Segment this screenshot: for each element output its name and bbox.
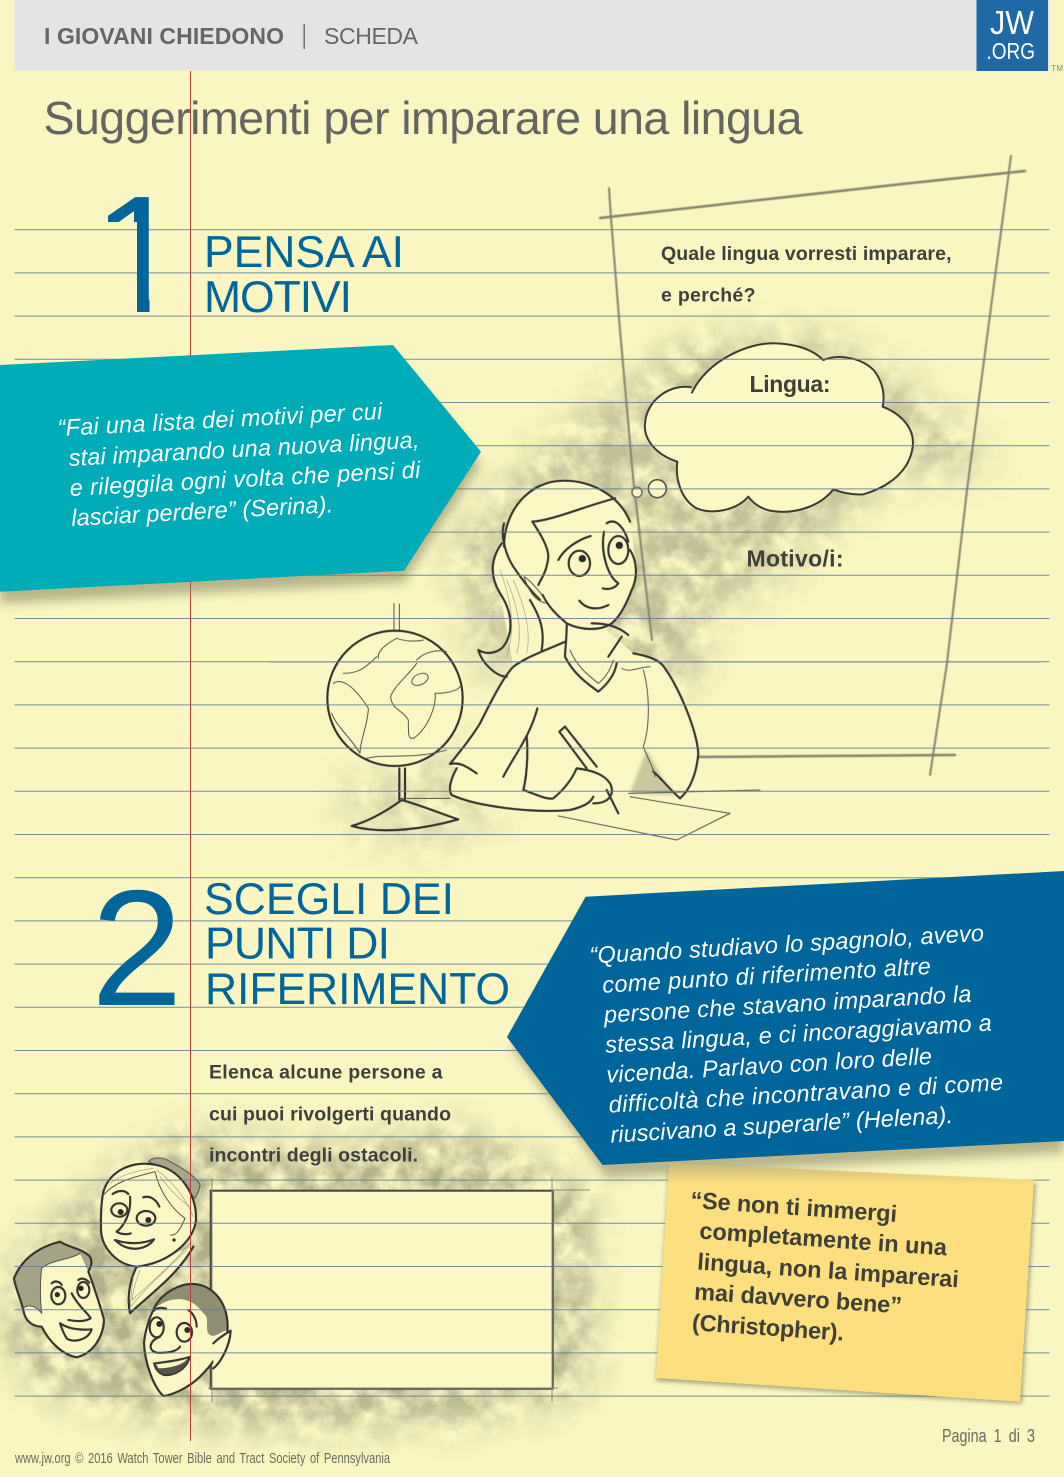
pencil smudge: behind faces and box: [0, 1130, 590, 1430]
prompt: which language: e perché?: [661, 284, 756, 306]
icon: thought cloud: [632, 343, 913, 512]
prompt: which language: [661, 243, 952, 306]
callout: Helena quote: “Quando studiavo lo spagnolo, avevo: [589, 920, 985, 968]
prompt: people to contact: [209, 1062, 451, 1166]
callout: Helena quote: [507, 871, 1064, 1178]
prompt: people to contact: incontri degli ostacoli.: [209, 1144, 418, 1166]
logo: JW.ORG: .ORG: [986, 38, 1035, 64]
illustration: three faces: [14, 1158, 231, 1396]
sticky note: Christopher quote: [656, 1163, 1036, 1404]
section 2 heading: [204, 875, 510, 1014]
callout: Serina quote: stai imparando una nuova lingua,: [68, 427, 420, 471]
section 2 number: 2: [91, 856, 183, 1040]
callout: Serina quote: [0, 345, 481, 604]
section 2 heading: RIFERIMENTO: [205, 965, 510, 1014]
header bar: I GIOVANI CHIEDONO: [44, 23, 284, 49]
title: Suggerimenti per imparare una lingua: [44, 92, 803, 144]
callout: Serina quote: “Fai una lista dei motivi per cui: [57, 398, 384, 441]
header bar: SCHEDA: [324, 23, 419, 49]
sticky note: Christopher quote: “Se non ti immergi: [690, 1187, 898, 1227]
icon: globe: [327, 603, 463, 830]
section 2 heading: PUNTI DI: [205, 920, 390, 968]
sticky note: Christopher quote: mai davvero bene”: [693, 1278, 903, 1318]
pencil box: people to contact: [208, 1178, 590, 1402]
callout: Helena quote: stessa lingua, e ci incoraggiavamo a: [604, 1010, 992, 1058]
ruled notebook lines: [14, 230, 1050, 1396]
callout: Serina quote: lasciar perdere” (Serina).: [71, 491, 334, 531]
logo: JW.ORG: JW: [990, 4, 1035, 41]
section 1 number: 1: [92, 162, 185, 348]
illustration: girl with globe: [327, 481, 760, 840]
page number: Pagina 1 di 3: [942, 1426, 1035, 1446]
label: reasons: Motivo/i:: [746, 546, 844, 572]
red margin line: [190, 71, 191, 1441]
callout: Helena quote: vicenda. Parlavo con loro delle: [606, 1043, 933, 1088]
logo: JW.ORG: TM: [1051, 64, 1063, 73]
section 1 heading: [204, 228, 404, 322]
icon: man face right: [144, 1284, 231, 1396]
section 2 heading: SCEGLI DEI: [204, 875, 454, 924]
pencil frame: language box: [600, 156, 1025, 775]
sticky note: Christopher quote: lingua, non la imparerai: [696, 1249, 960, 1292]
label: language: Lingua:: [750, 371, 830, 397]
callout: Helena quote: riuscivano a superarle” (Helena).: [610, 1102, 954, 1148]
icon: man face left: [14, 1242, 104, 1357]
prompt: which language: Quale lingua vorresti imparare,: [661, 243, 952, 265]
pencil smudge: behind girl: [330, 335, 1000, 850]
section 1 heading: PENSA AI: [204, 228, 404, 277]
logo: JW.ORG: [976, 0, 1063, 73]
callout: Helena quote: difficoltà che incontravano e di come: [608, 1069, 1004, 1118]
icon: woman face: [101, 1158, 200, 1313]
copyright footer: www.jw.org © 2016 Watch Tower Bible and Tract Society of Pennsylvania: [14, 1451, 391, 1467]
prompt: people to contact: Elenca alcune persone a: [209, 1062, 443, 1084]
callout: Helena quote: persone che stavano imparando la: [602, 981, 972, 1028]
header bar: [14, 0, 1050, 70]
sticky note: Christopher quote: completamente in una: [699, 1218, 949, 1260]
callout: Helena quote: come punto di riferimento altre: [601, 953, 931, 998]
sticky note: Christopher quote: (Christopher).: [691, 1309, 845, 1346]
callout: Serina quote: e rileggila ogni volta che pensi di: [69, 457, 422, 501]
prompt: people to contact: cui puoi rivolgerti quando: [209, 1104, 451, 1126]
icon: girl: [400, 481, 760, 840]
section 1 heading: MOTIVI: [204, 273, 352, 322]
